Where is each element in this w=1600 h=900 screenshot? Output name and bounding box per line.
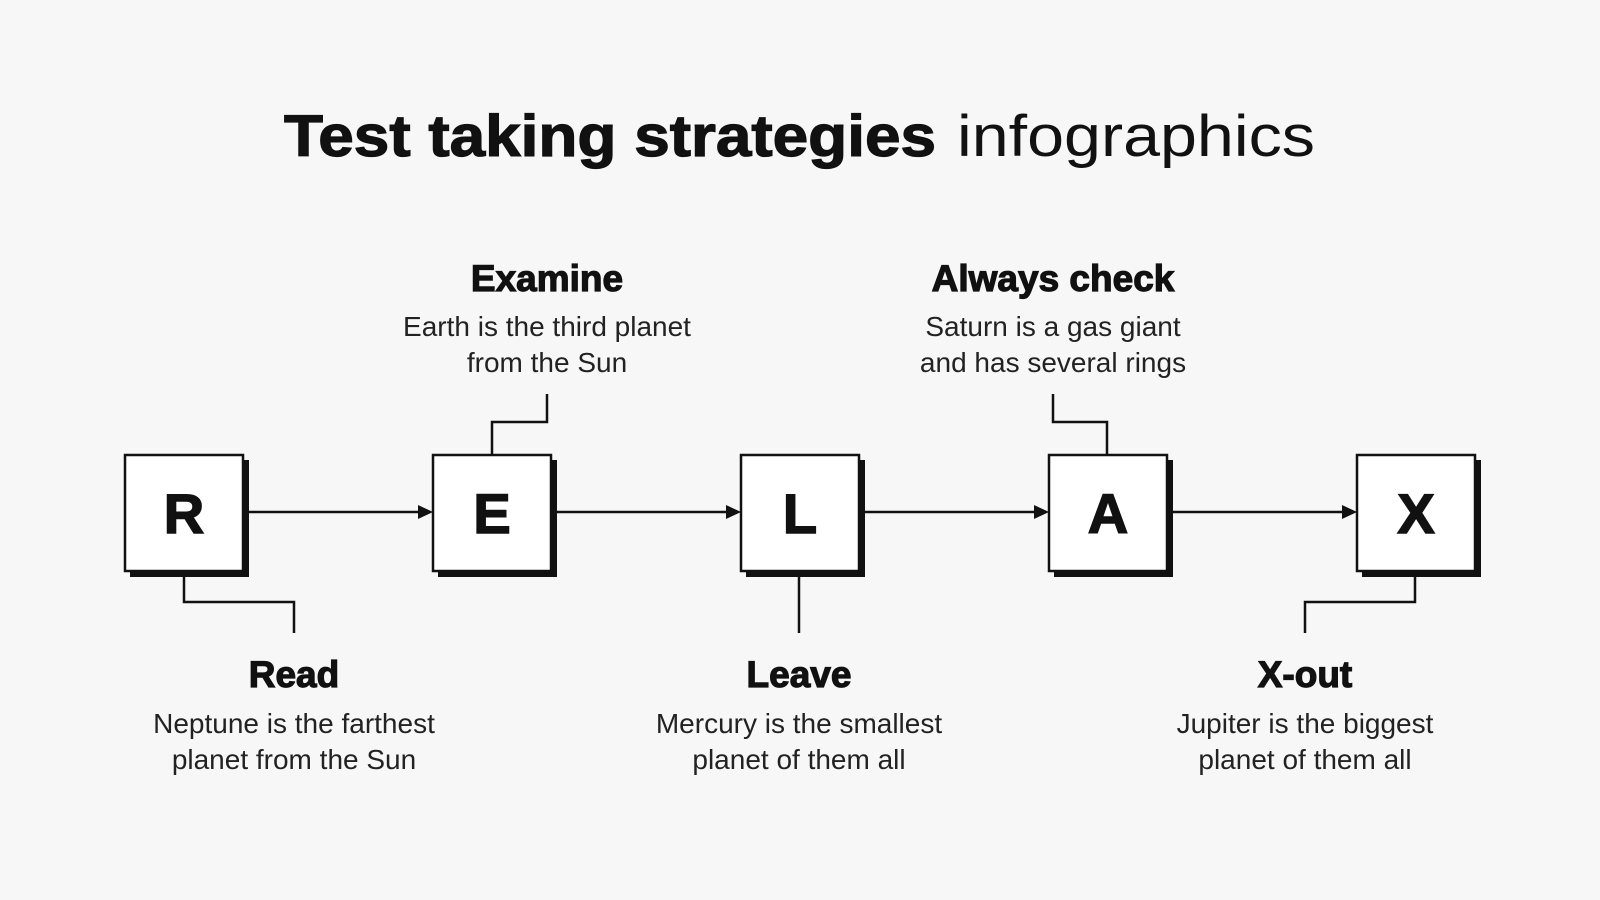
- label: Always check: [920, 258, 1186, 378]
- box X: X: [1397, 482, 1435, 545]
- label: X-out: Jupiter is the biggest: [1177, 708, 1434, 739]
- box X: [1357, 455, 1481, 577]
- label: Read: [153, 654, 435, 775]
- label: Always check: and has several rings: [920, 347, 1186, 378]
- box E: [433, 455, 557, 577]
- title: Test taking strategies: [284, 104, 936, 169]
- label: Read: Neptune is the farthest: [153, 708, 435, 739]
- title: infographics: [957, 104, 1315, 169]
- label: Leave: Leave: [747, 654, 851, 695]
- title: [284, 104, 1315, 169]
- box L: [741, 455, 865, 577]
- label: Always check: Always check: [932, 258, 1175, 299]
- label: Examine: from the Sun: [467, 347, 627, 378]
- box E: E: [473, 482, 511, 545]
- box R: [125, 455, 249, 577]
- label: Examine: Examine: [471, 258, 623, 299]
- box L: L: [783, 482, 817, 545]
- label: X-out: [1177, 654, 1434, 775]
- label: Examine: [403, 258, 691, 378]
- label: X-out: planet of them all: [1198, 744, 1412, 775]
- label: Always check: Saturn is a gas giant: [925, 311, 1181, 342]
- label: Examine: Earth is the third planet: [403, 311, 691, 342]
- label: Leave: planet of them all: [692, 744, 906, 775]
- box R: R: [164, 482, 204, 545]
- arrows between boxes: [249, 505, 1357, 519]
- box A: [1049, 455, 1173, 577]
- label: Leave: [656, 654, 942, 775]
- connectors: [184, 394, 1415, 633]
- label: Leave: Mercury is the smallest: [656, 708, 942, 739]
- label: Read: Read: [249, 654, 339, 695]
- label: Read: planet from the Sun: [172, 744, 416, 775]
- box A: A: [1088, 482, 1128, 545]
- label: X-out: X-out: [1258, 654, 1352, 695]
